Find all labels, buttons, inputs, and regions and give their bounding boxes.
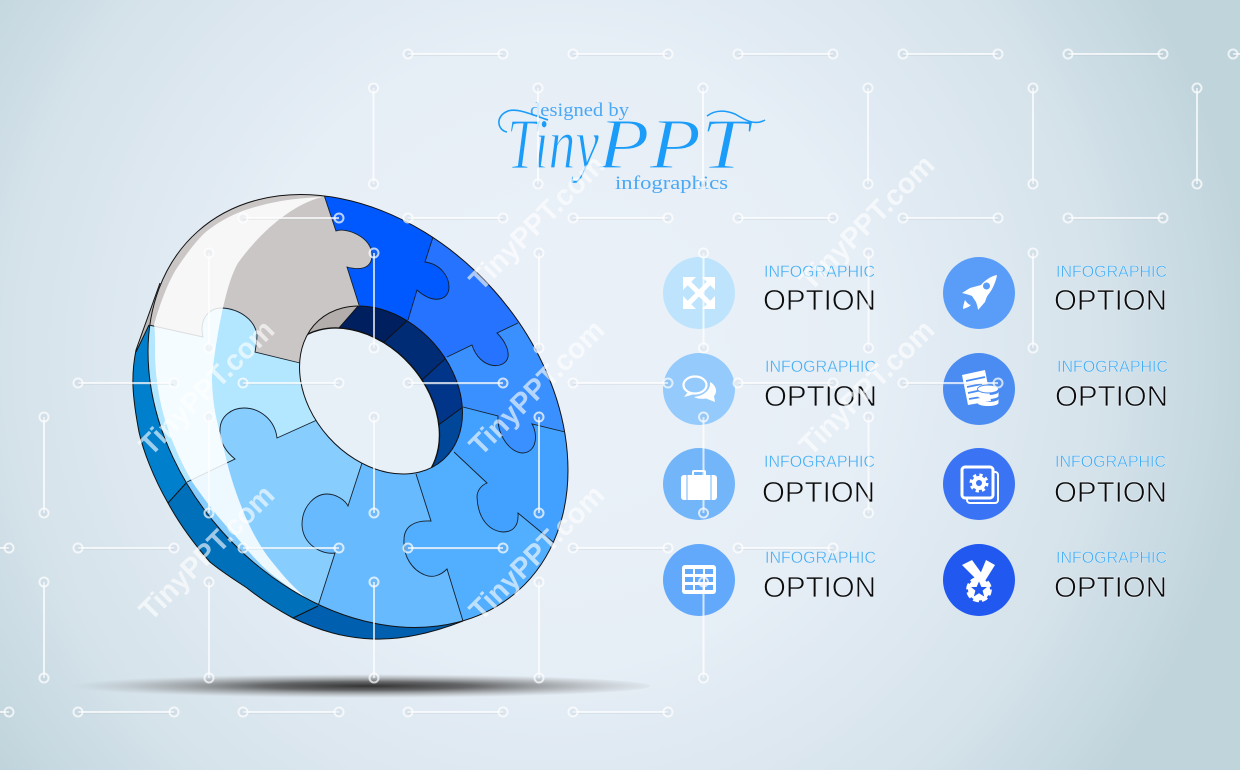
- piece 2 blue: [408, 238, 518, 366]
- ring outer side wall: [132, 282, 464, 640]
- option 4 label: INFOGRAPHIC: [765, 548, 876, 567]
- option 3: [663, 448, 875, 520]
- piece 7 light blue: [186, 408, 362, 604]
- option 4 title: OPTION: [763, 572, 876, 604]
- icon: rocket: [943, 257, 1015, 329]
- option 7: [943, 448, 1167, 520]
- option 8 title: OPTION: [1054, 572, 1167, 604]
- option 5 label: INFOGRAPHIC: [1056, 262, 1167, 281]
- piece 8 pale blue: [148, 308, 316, 482]
- piece 5 sky blue: [404, 450, 550, 620]
- ring front face puzzle pieces: [148, 195, 568, 627]
- option 6 title: OPTION: [1055, 381, 1168, 413]
- option 7 title: OPTION: [1054, 477, 1167, 509]
- icon: chat bubbles: [663, 353, 735, 425]
- option 5 title: OPTION: [1054, 285, 1167, 317]
- option 7 label: INFOGRAPHIC: [1055, 452, 1166, 471]
- option 5: [943, 257, 1167, 329]
- hole outline: [266, 273, 496, 507]
- logo wordmark: PPT: PPT: [597, 104, 754, 184]
- piece 3 blue: [446, 323, 564, 452]
- logo wordmark: Tiny: Tiny: [507, 104, 599, 184]
- puzzle ring: [132, 194, 568, 640]
- option 1: [663, 257, 876, 329]
- icon: table: [663, 544, 735, 616]
- option 2 label: INFOGRAPHIC: [765, 357, 876, 376]
- piece 1 royal blue: [325, 196, 449, 321]
- ring hole inner wall: [300, 306, 462, 474]
- option 8 label: INFOGRAPHIC: [1056, 548, 1167, 567]
- icon: briefcase: [663, 448, 735, 520]
- icon: expand arrows: [663, 257, 735, 329]
- option 3 label: INFOGRAPHIC: [764, 452, 875, 471]
- option 4: [663, 544, 876, 616]
- watermarks: TinyPPT.com: [133, 314, 281, 462]
- icon: gear in frame: [943, 448, 1015, 520]
- watermarks: TinyPPT.com: [793, 149, 941, 297]
- piece 9 grey: [150, 209, 322, 362]
- option 1 title: OPTION: [763, 285, 876, 317]
- icon: medal: [943, 544, 1015, 616]
- watermarks: [133, 149, 941, 627]
- watermarks: TinyPPT.com: [463, 314, 611, 462]
- front rim outline: [62, 110, 654, 712]
- icon: document and database: [943, 353, 1015, 425]
- option 2 title: OPTION: [764, 381, 877, 413]
- option 2: [663, 353, 877, 425]
- option 1 label: INFOGRAPHIC: [764, 262, 875, 281]
- piece 6 sky blue: [302, 464, 462, 627]
- option 6 label: INFOGRAPHIC: [1057, 357, 1168, 376]
- option 3 title: OPTION: [762, 477, 875, 509]
- logo flourish: [499, 110, 765, 132]
- watermarks: TinyPPT.com: [463, 149, 611, 297]
- watermarks: TinyPPT.com: [133, 479, 281, 627]
- logo line: designed by: designed by: [530, 100, 630, 121]
- watermarks: TinyPPT.com: [463, 479, 611, 627]
- logo line: infographics: infographics: [615, 173, 728, 194]
- glossy highlight: [154, 197, 322, 606]
- piece outlines: [149, 195, 565, 621]
- piece 4 blue: [452, 408, 568, 541]
- option 8: [943, 544, 1167, 616]
- option 6: [943, 353, 1168, 425]
- watermarks: TinyPPT.com: [793, 314, 941, 462]
- ground shadow: [50, 674, 650, 698]
- logo: designed by TinyPPT infographics: [499, 100, 765, 194]
